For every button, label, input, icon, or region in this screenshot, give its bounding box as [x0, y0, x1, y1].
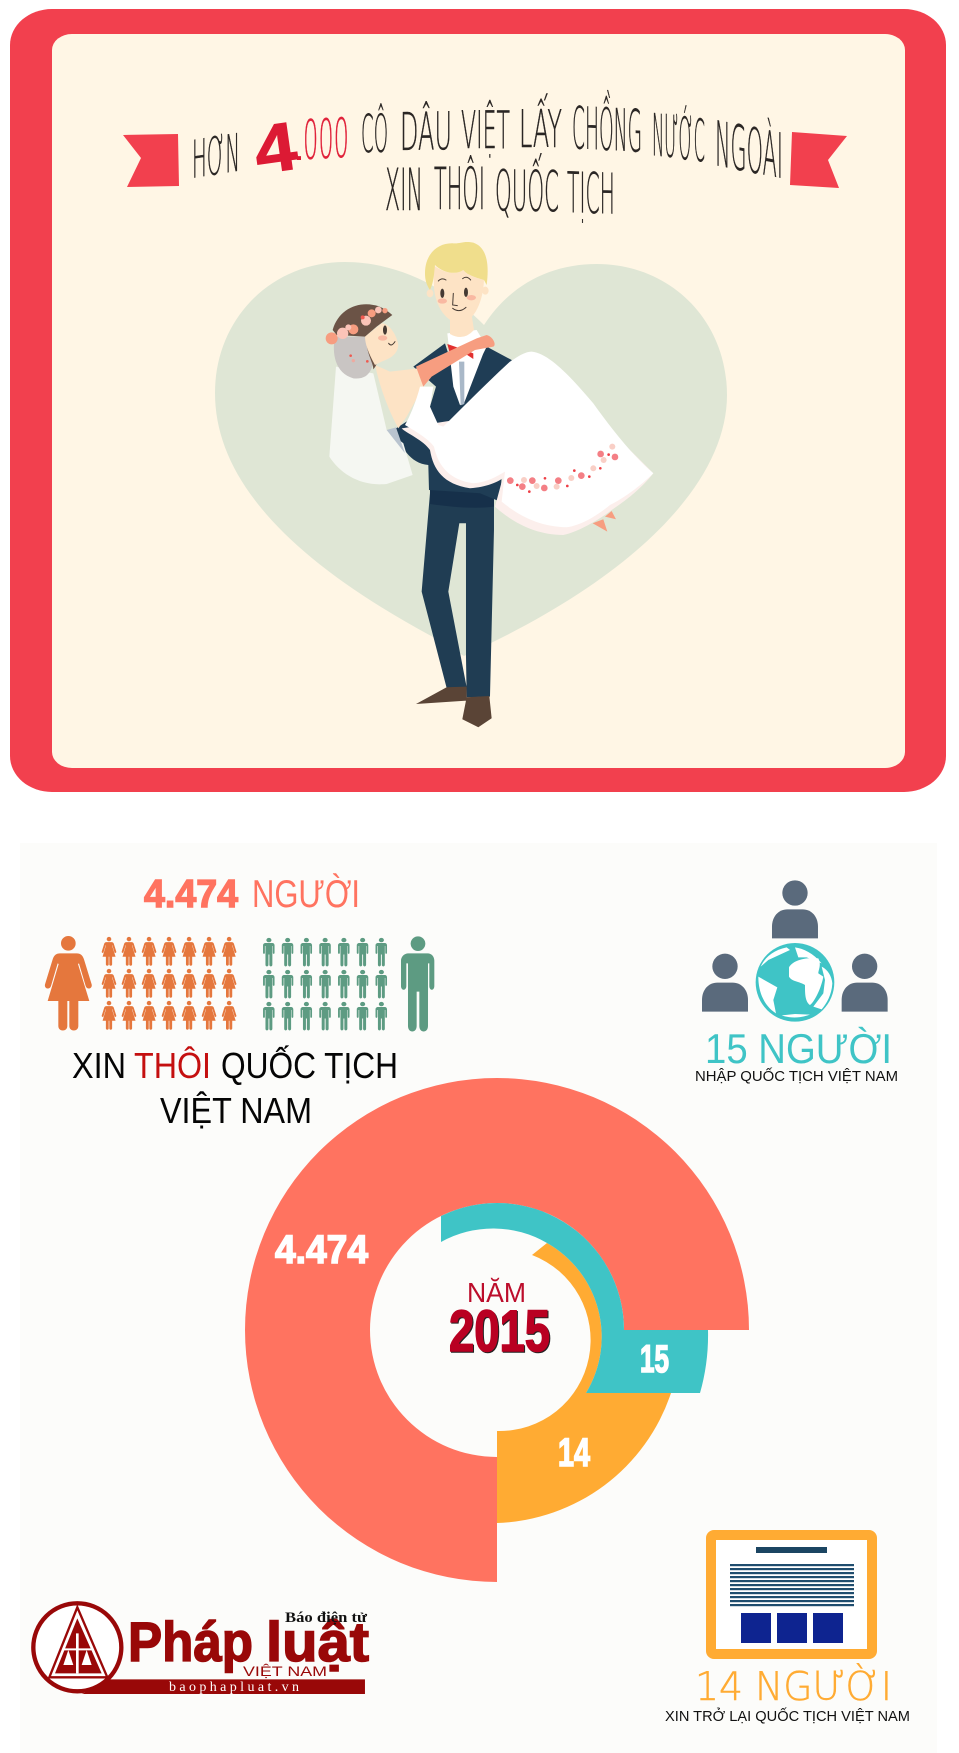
segment: orange 14: [497, 1243, 671, 1523]
value: 15: 15: [640, 1338, 669, 1381]
bride's hair lock: [367, 343, 377, 369]
stat: 15 người: 15 NGƯỜI: [705, 1025, 892, 1072]
panel: statistics background: [20, 843, 937, 1753]
groom's jacket: [396, 343, 512, 502]
right ribbon: [790, 132, 847, 188]
groom's neck: [450, 315, 474, 337]
center label: năm: NĂM: [467, 1277, 526, 1308]
title banner: [123, 87, 847, 228]
right person: [842, 954, 888, 1012]
bow tie: [447, 344, 473, 359]
groom's ears: [427, 287, 489, 297]
caption: xin thôi quốc tịch Việt Nam: THÔI: [134, 1045, 211, 1086]
value: 14: 14: [558, 1431, 591, 1475]
logo: Báo điện tử Pháp luật Việt Nam: [33, 1603, 369, 1695]
bride's hair: [333, 304, 392, 337]
center label: 2015: 2015: [449, 1299, 550, 1364]
wedding dress: [405, 352, 653, 527]
bride's facial features: [378, 325, 395, 345]
dress flowers: [507, 444, 618, 493]
flower crown: [326, 307, 388, 363]
title line one: NƯỚC: [652, 100, 705, 175]
left person: [702, 954, 748, 1012]
title line two: XIN: [385, 156, 423, 224]
text lines: [730, 1564, 854, 1606]
title banner: TỊCH: [567, 161, 615, 228]
chart: radial donut: [245, 1078, 749, 1582]
small men grid: [263, 938, 387, 1030]
title line one: [192, 87, 783, 193]
globe: [756, 943, 834, 1022]
title line one: CÔ: [361, 103, 388, 165]
top person: [772, 880, 818, 938]
big woman icon: [45, 936, 92, 1030]
logo: Việt Nam: VIỆT NAM: [243, 1663, 327, 1679]
big man icon: [401, 936, 434, 1031]
stat: 4.474 người heading: [144, 873, 360, 916]
icon: people around a globe: [702, 880, 888, 1022]
bride's arm: [416, 335, 495, 387]
caption: xin thôi quốc tịch Việt Nam: XIN: [72, 1045, 126, 1086]
blue squares: [741, 1613, 843, 1643]
groom's face: [433, 265, 484, 323]
illustration: groom carrying bride: [326, 242, 653, 727]
small women grid: [102, 937, 236, 1030]
logo wordmark: luật: luật: [266, 1610, 369, 1673]
pictogram: men: [263, 936, 434, 1031]
stat: 4.474 người heading: 4.474: [144, 873, 238, 916]
stat: 14 người: 14 NGƯỜI: [695, 1663, 892, 1710]
bride's veil: [329, 367, 413, 484]
icon: document with orange frame: [711, 1535, 872, 1654]
title line one: 000: [303, 107, 349, 172]
title line one: 4: [250, 108, 302, 189]
caption: xin thôi quốc tịch Việt Nam: QUỐC TỊCH: [221, 1044, 398, 1086]
title line two: [385, 153, 615, 228]
title line two: THÔI: [434, 154, 485, 223]
logo tagline: Báo điện tử: Báo điện tử: [285, 1610, 368, 1626]
groom's belt shadow: [430, 490, 494, 508]
bride's neck and shoulder: [375, 365, 423, 428]
groom's shoes: [416, 687, 492, 727]
value: 4.474: 4.474: [275, 1228, 369, 1272]
caption: xin trở lại quốc tịch Việt Nam: XIN TRỞ LẠI QUỐC TỊCH VIỆT NAM: [665, 1707, 910, 1725]
caption: nhập quốc tịch Việt Nam: NHẬP QUỐC TỊCH VIỆT NAM: [695, 1067, 898, 1085]
title line one: CHỒNG: [572, 87, 642, 166]
logo emblem: [33, 1603, 365, 1694]
caption: xin thôi quốc tịch Việt Nam: [72, 1044, 398, 1131]
heart background: [215, 262, 727, 656]
bride's face: [365, 323, 398, 365]
title line one: DÂU: [400, 101, 452, 163]
stat: 4.474 người heading: NGƯỜI: [252, 873, 360, 916]
segment: teal 15: [441, 1203, 708, 1393]
tie stripes: [459, 362, 464, 405]
wedding dress hem: [402, 417, 653, 535]
title line two: QUỐC: [495, 153, 559, 225]
pictogram: women: [45, 936, 236, 1030]
groom's sleeve cuff: [387, 427, 405, 453]
segment: coral 4.474: [245, 1078, 749, 1582]
bride's feet: [593, 511, 616, 532]
groom's trousers: [422, 493, 494, 697]
logo wordmark: Pháp: Pháp: [128, 1610, 253, 1673]
left ribbon: [123, 134, 179, 187]
groom's shirt: [447, 330, 487, 405]
title line one: .: [295, 136, 303, 166]
groom's facial features: [438, 277, 476, 311]
title line one: HƠN: [192, 123, 240, 191]
caption: xin thôi quốc tịch Việt Nam: VIỆT NAM: [160, 1090, 312, 1131]
title line one: LẤY: [519, 93, 562, 160]
panel: red frame with cream card: [10, 9, 946, 792]
document title bar: [756, 1547, 827, 1553]
title banner: NGOÀI: [715, 108, 783, 193]
groom's hair: [425, 242, 488, 290]
logo url: baophapluat.vn: [169, 1680, 299, 1695]
title line one: VIỆT: [461, 100, 510, 161]
bride's veiled hair: [334, 337, 373, 379]
